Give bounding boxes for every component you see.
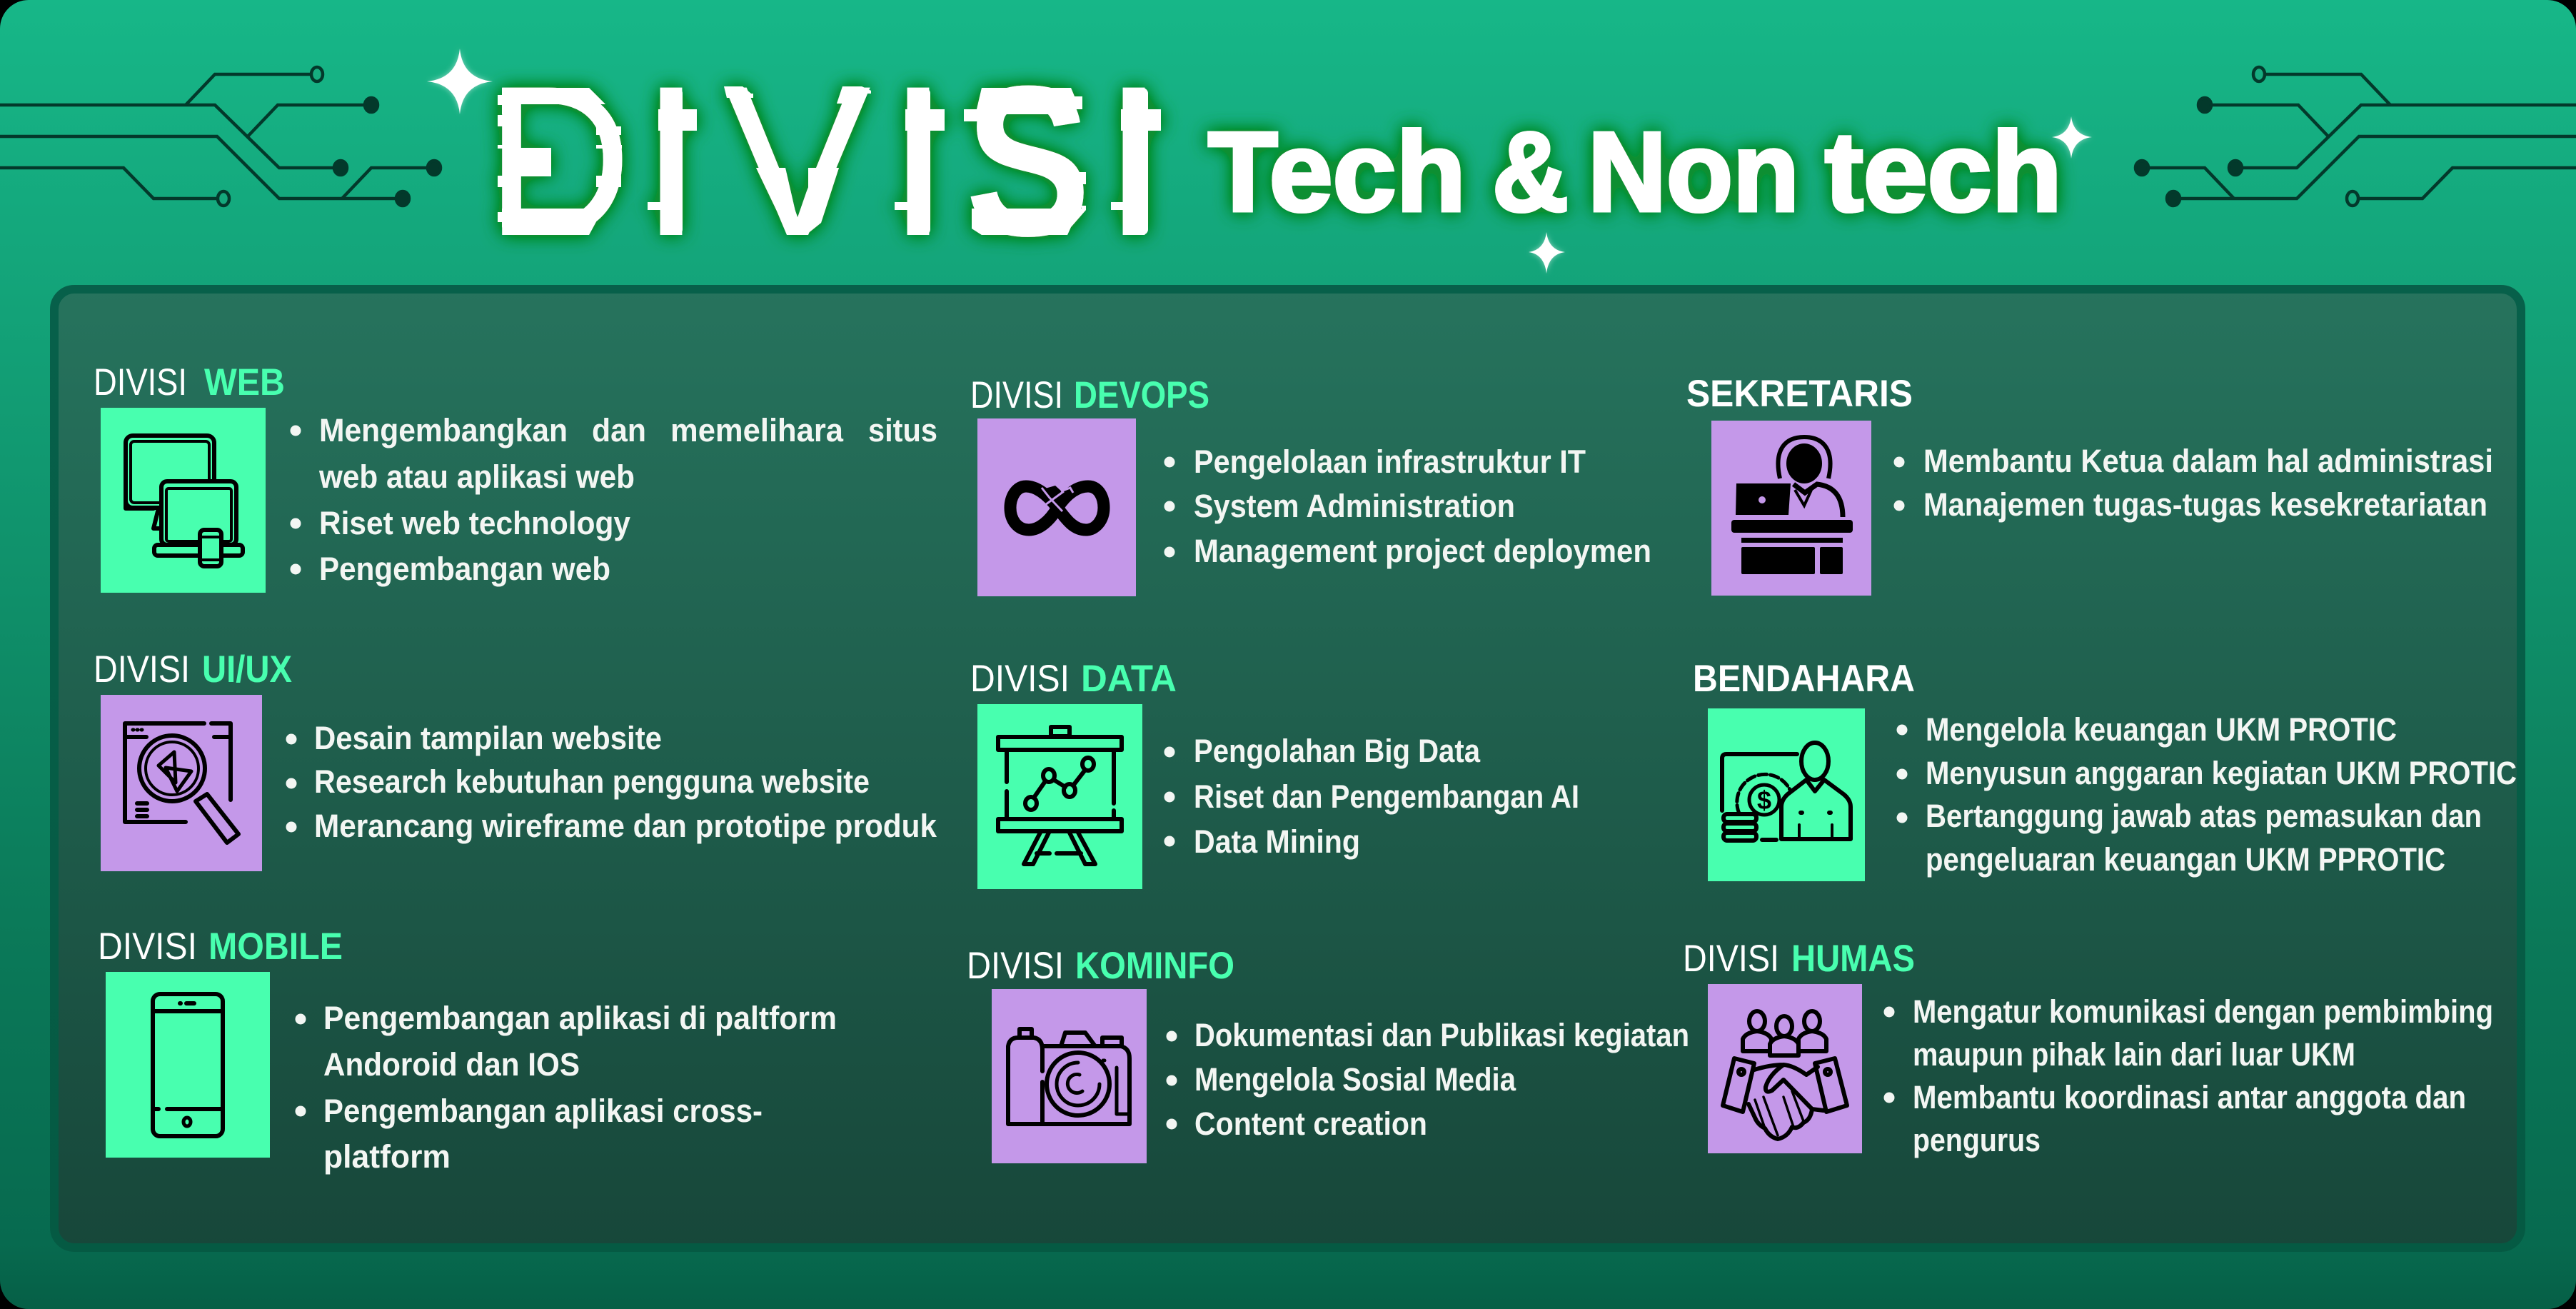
heading: DIVISI WEB: WEB (204, 361, 285, 403)
bullet list: pengurus (1913, 1122, 2041, 1158)
bullet list (1164, 733, 1579, 860)
heading: BENDAHARA: BENDAHARA (1693, 658, 1915, 700)
icon: smartphone (106, 972, 270, 1158)
division: DATA (970, 658, 1579, 889)
title: DIVISI glitch text: I (638, 41, 704, 281)
icon: camera (992, 989, 1147, 1163)
title: Tech & Non tech: Non (1588, 109, 1799, 235)
bullet list: Membantu Ketua dalam hal administrasi (1923, 443, 2493, 479)
title: DIVISI glitch text: I (885, 41, 951, 281)
bullet list: Riset web technology (319, 505, 630, 541)
bullet list (296, 1000, 837, 1175)
bullet list (290, 412, 937, 587)
division: KOMINFO (967, 945, 1689, 1163)
bullet list (1164, 443, 1651, 569)
heading: DIVISI DEVOPS: DIVISI (970, 374, 1063, 416)
heading: DIVISI KOMINFO: KOMINFO (1075, 945, 1234, 987)
bullet list: Membantu koordinasi antar anggota dan (1913, 1079, 2466, 1115)
division: MOBILE (98, 926, 837, 1175)
bullet list: web atau aplikasi web (318, 458, 635, 495)
heading: DIVISI DATA: DATA (1081, 658, 1177, 700)
bullet list (1167, 1017, 1689, 1142)
title: Tech & Non tech: Tech (1208, 109, 1466, 235)
title: DIVISI glitch text: D (485, 41, 632, 281)
sparkle 2 (2052, 116, 2092, 159)
bullet list: dan (592, 412, 646, 448)
bullet list: Research kebutuhan pengguna website (314, 763, 870, 800)
bullet list: Pengembangan web (319, 551, 610, 587)
sparkle 3 (1529, 232, 1565, 274)
heading: DIVISI MOBILE: MOBILE (208, 926, 343, 968)
bullet list: Desain tampilan website (314, 720, 662, 756)
main panel (54, 289, 2521, 1248)
bullet list: Bertanggung jawab atas pemasukan dan (1926, 798, 2482, 834)
icon: treasurer: $ (1757, 786, 1771, 815)
icon: treasurer (1708, 708, 1865, 881)
bullet list: maupun pihak lain dari luar UKM (1913, 1036, 2355, 1073)
circuit decoration right (2135, 67, 2576, 206)
icon: magnifier over window (101, 695, 262, 871)
heading: DIVISI WEB: DIVISI (94, 361, 187, 403)
title: Tech & Non tech: & (1492, 109, 1569, 235)
bullet list: Data Mining (1194, 823, 1360, 860)
heading: DIVISI HUMAS: HUMAS (1791, 938, 1915, 980)
bullet list: situs (868, 412, 937, 448)
bullet list: Pengolahan Big Data (1194, 733, 1481, 769)
bullet list: System Administration (1194, 488, 1515, 524)
division: DEVOPS (970, 374, 1651, 596)
sparkle 1 (427, 49, 493, 114)
bullet list (1896, 711, 2517, 878)
division: SEKRETARIS (1686, 373, 2493, 596)
title: DIVISI glitch text: V (724, 41, 872, 281)
icon: presentation board (977, 704, 1142, 889)
title: DIVISI glitch text: S (965, 41, 1091, 281)
division: UI/UX (94, 648, 937, 871)
bullet list: Pengelolaan infrastruktur IT (1194, 443, 1586, 480)
bullet list: Dokumentasi dan Publikasi kegiatan (1194, 1017, 1689, 1053)
bullet list: Merancang wireframe dan prototipe produk (314, 808, 937, 844)
heading: DIVISI MOBILE (98, 926, 343, 968)
heading: DIVISI MOBILE: DIVISI (98, 926, 197, 968)
title: Tech & Non tech: tech (1825, 109, 2062, 235)
bullet list: Mengelola Sosial Media (1194, 1061, 1516, 1098)
division: BENDAHARA (1693, 658, 2517, 881)
bullet list: Pengembangan aplikasi cross- (323, 1093, 763, 1129)
bullet list: platform (323, 1138, 451, 1175)
bullet list: Mengelola keuangan UKM PROTIC (1926, 711, 2397, 748)
heading: DIVISI UI/UX: DIVISI (94, 648, 190, 691)
icon: handshake and team (1708, 984, 1862, 1153)
bullet list: Riset dan Pengembangan AI (1194, 778, 1579, 815)
heading: SEKRETARIS: SEKRETARIS (1686, 373, 1913, 415)
bullet list: Pengembangan aplikasi di paltform (323, 1000, 837, 1036)
heading: DIVISI KOMINFO: DIVISI (967, 945, 1064, 987)
bullet list: memelihara (670, 412, 844, 448)
heading: DIVISI DEVOPS (970, 374, 1209, 416)
bullet list: pengeluaran keuangan UKM PPROTIC (1926, 841, 2445, 878)
icon: infinity loop (977, 418, 1136, 596)
division: HUMAS (1683, 938, 2493, 1158)
bullet list: Manajemen tugas-tugas kesekretariatan (1923, 486, 2487, 523)
bullet list (286, 720, 937, 844)
heading: DIVISI WEB (94, 361, 285, 403)
heading: DIVISI UI/UX (94, 648, 292, 691)
title: Tech & Non tech (1208, 109, 2062, 235)
bullet list: Andoroid dan IOS (323, 1046, 580, 1083)
heading: DIVISI HUMAS: DIVISI (1683, 938, 1779, 980)
circuit decoration left (0, 67, 441, 206)
heading: DIVISI UI/UX: UI/UX (202, 648, 292, 691)
bullet list (1883, 993, 2493, 1158)
bullet list: Mengembangkan (319, 412, 568, 448)
bullet list: Content creation (1194, 1105, 1427, 1142)
heading: DIVISI DATA (970, 658, 1177, 700)
icon: devices (101, 408, 266, 593)
bullet list: Mengatur komunikasi dengan pembimbing (1913, 993, 2493, 1030)
title: DIVISI glitch text: I (1101, 41, 1167, 281)
division: WEB (94, 361, 937, 593)
heading: DIVISI DATA: DIVISI (970, 658, 1070, 700)
bullet list (1893, 443, 2493, 523)
heading: DIVISI KOMINFO (967, 945, 1234, 987)
bullet list: Menyusun anggaran kegiatan UKM PROTIC (1926, 755, 2517, 791)
heading: DIVISI DEVOPS: DEVOPS (1074, 374, 1209, 416)
title: DIVISI glitch text (485, 41, 1167, 281)
icon: secretary at desk (1711, 421, 1871, 596)
heading: DIVISI HUMAS (1683, 938, 1915, 980)
bullet list: Management project deploymen (1194, 533, 1651, 569)
